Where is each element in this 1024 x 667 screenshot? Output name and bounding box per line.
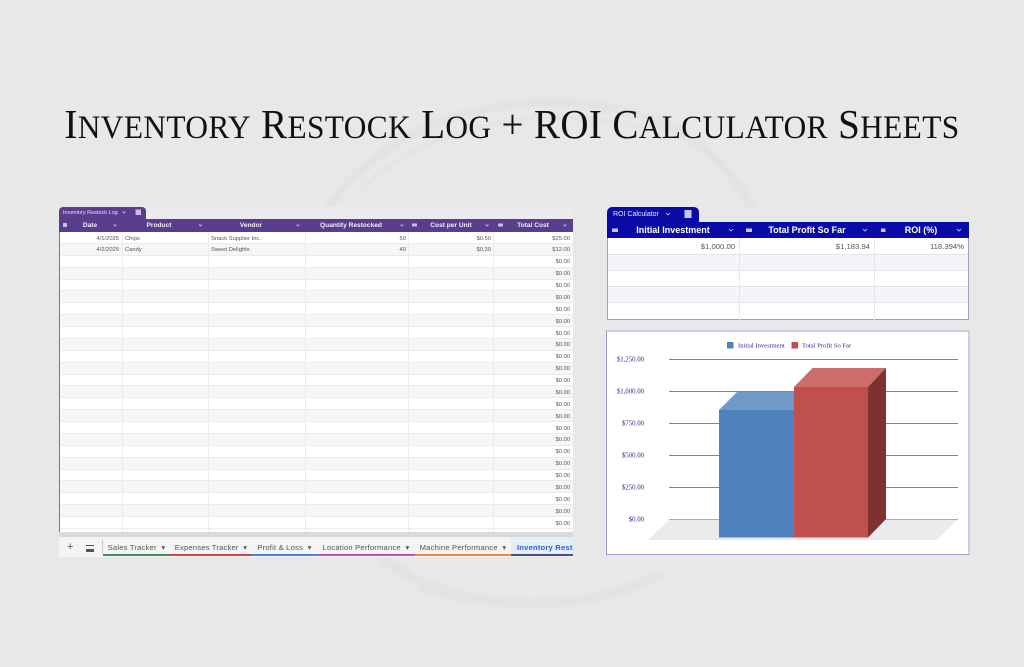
tab: Location Performance: Location Performance ▾ <box>323 543 409 552</box>
sheet tab: Inventory Restock Log <box>59 207 146 220</box>
rows: $0.00 <box>555 342 570 348</box>
rows: $0.00 <box>555 295 570 301</box>
table header: Total Cost <box>517 222 549 229</box>
y axis labels: $1,250.00 <box>617 356 645 364</box>
bar: initial investment <box>719 392 800 538</box>
rows: $0.00 <box>555 497 570 503</box>
rows: Snack Supplier Inc. <box>211 236 261 242</box>
legend <box>727 342 852 350</box>
chart floor <box>648 520 957 540</box>
rows: $0.00 <box>555 449 570 455</box>
ROI value: initial investment: $1,000.00 <box>701 242 735 251</box>
rows: $0.00 <box>555 390 570 396</box>
add sheet icon: + <box>67 541 73 553</box>
scrollbar <box>59 532 573 537</box>
y axis labels: $1,000.00 <box>617 388 645 396</box>
rows: 50 <box>400 236 406 242</box>
tab: Machine Performance <box>415 537 511 556</box>
panel: inventory restock log <box>59 207 573 557</box>
rows: Chips <box>125 236 140 242</box>
y axis labels: $250.00 <box>622 484 645 492</box>
table header: Date <box>83 222 97 229</box>
rows: $12.00 <box>552 247 570 253</box>
rows: $0.00 <box>555 330 570 336</box>
table header: Vendor <box>240 222 262 229</box>
sheet tab: ROI Calculator: ROI Calculator <box>613 211 659 218</box>
legend: Total Profit So Far <box>802 342 852 350</box>
ROI table header: Initial Investment <box>636 225 710 235</box>
rows: Sweet Delights <box>211 247 250 253</box>
sheet tab: ROI Calculator <box>607 207 699 223</box>
rows: $0.00 <box>555 366 570 372</box>
rows: $25.00 <box>552 236 570 242</box>
rows: $0.00 <box>555 354 570 360</box>
chart panel: initial investment vs total profit <box>606 330 970 555</box>
tab separator <box>102 540 103 554</box>
rows: $0.00 <box>555 414 570 420</box>
rows: $0.00 <box>555 473 570 479</box>
rows: $0.00 <box>555 378 570 384</box>
rows: $0.00 <box>555 520 570 526</box>
ROI value: ROI percent: 118.394% <box>930 242 964 251</box>
table body <box>59 232 573 532</box>
table header <box>59 219 573 232</box>
ROI table header: ROI (%) <box>905 225 937 235</box>
table header: Quantity Restocked <box>320 222 382 229</box>
tab: Inventory Restock Log active <box>511 537 573 556</box>
rows: $0.00 <box>555 437 570 443</box>
rows: Candy <box>125 247 142 253</box>
rows: 40 <box>400 247 406 253</box>
rows: $0.00 <box>555 485 570 491</box>
y axis labels: $0.00 <box>629 516 645 524</box>
rows: $0.30 <box>476 247 491 253</box>
title: INVENTORY RESTOCK LOG + ROI CALCULATOR SHEETS <box>64 101 960 147</box>
rows: $0.00 <box>555 271 570 277</box>
tab: Expenses Tracker <box>170 537 252 556</box>
rows: 4/1/2025 <box>96 236 119 242</box>
y axis labels: $750.00 <box>622 420 645 428</box>
ROI value: total profit: $1,183.94 <box>836 242 870 251</box>
sheet list icon <box>86 545 94 550</box>
ROI table header <box>607 222 969 238</box>
rows: $0.00 <box>555 307 570 313</box>
rows: 4/2/2025 <box>96 247 119 253</box>
rows: $0.00 <box>555 426 570 432</box>
rows: $0.00 <box>555 402 570 408</box>
tab: Expenses Tracker: Expenses Tracker ▾ <box>175 543 247 552</box>
rows: $0.00 <box>555 259 570 265</box>
sheet tab: Inventory Restock Log: Inventory Restock Log <box>63 210 118 216</box>
y axis labels: $500.00 <box>622 452 645 460</box>
tab: Profit & Loss: Profit & Loss ▾ <box>257 543 312 552</box>
tab strip background <box>59 207 573 219</box>
tab: Location Performance <box>317 537 415 556</box>
tab: Profit & Loss <box>252 537 317 556</box>
ROI table body <box>607 238 969 320</box>
y axis labels <box>617 356 645 524</box>
tab: Machine Performance: Machine Performance ▾ <box>420 543 506 552</box>
rows: $0.00 <box>555 319 570 325</box>
table header: Product <box>147 222 171 229</box>
tab: Sales Tracker: Sales Tracker ▾ <box>108 543 165 552</box>
rows: $0.00 <box>555 283 570 289</box>
tab: Sales Tracker <box>103 537 170 556</box>
rows <box>60 236 573 529</box>
rows: $0.00 <box>555 461 570 467</box>
legend: Initial Investment <box>738 342 785 350</box>
rows: $0.50 <box>476 236 491 242</box>
bar: total profit so far <box>794 368 886 538</box>
panel: ROI calculator <box>607 207 969 320</box>
rows: $0.00 <box>555 509 570 515</box>
sheet tabs bar <box>59 537 573 557</box>
table header: Cost per Unit <box>430 222 472 229</box>
ROI table header: Total Profit So Far <box>768 225 846 235</box>
